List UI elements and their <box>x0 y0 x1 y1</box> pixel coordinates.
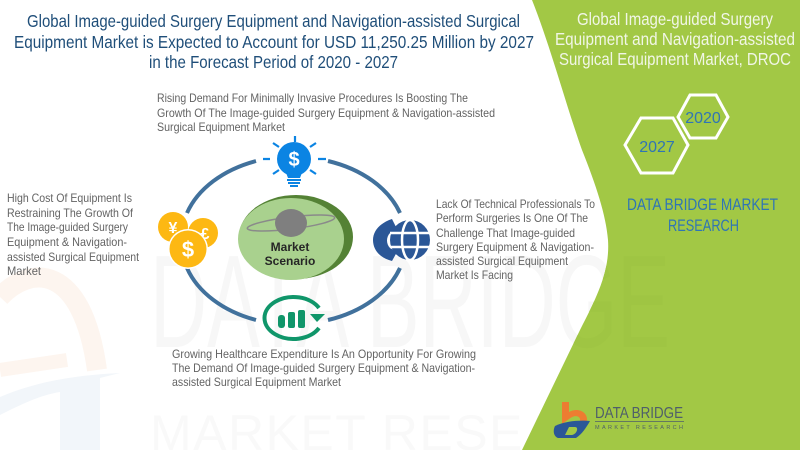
text block: challenges: Challenge That Image-guided <box>436 226 575 240</box>
text block: opportunities <box>172 347 476 389</box>
year hexagon: 2027: 2027 <box>639 139 675 156</box>
icon: growth chart with arrow <box>264 297 325 339</box>
text block: drivers: Surgical Equipment Market <box>157 120 286 134</box>
icon: phone and globe <box>373 219 430 261</box>
year hexagon: 2020: 2020 <box>685 110 721 127</box>
text block: drivers <box>157 91 495 134</box>
cycle ring <box>187 161 400 320</box>
center market scenario: Market <box>271 240 309 254</box>
text block: challenges: assisted Surgical Equipment <box>436 254 569 268</box>
background watermark <box>0 228 670 450</box>
text block: restraints: High Cost Of Equipment Is <box>7 191 132 205</box>
main title: Equipment Market is Expected to Account for USD 11,250.25 Million by 2027 <box>14 32 534 52</box>
main title: Global Image-guided Surgery Equipment and Navigation-assisted Surgical <box>27 11 520 31</box>
year hexagon: 2020 <box>678 95 728 138</box>
text block: opportunities: assisted Surgical Equipment Market <box>172 375 342 389</box>
text block: restraints: Restraining The Growth Of <box>7 206 134 220</box>
side panel title: Global Image-guided Surgery <box>577 9 773 29</box>
center market scenario: Scenario <box>265 254 315 268</box>
text block: restraints: Market <box>7 264 42 278</box>
icon: currency coins: $ <box>182 237 194 262</box>
center market scenario <box>238 195 353 280</box>
text block: drivers: Growth Of The Image-guided Surgery Equipment & Navigation-assisted <box>157 106 495 120</box>
text block: opportunities: The Demand Of Image-guided Surgery Equipment & Navigation- <box>172 361 475 375</box>
text block: opportunities: Growing Healthcare Expenditure Is An Opportunity For Growing <box>172 347 476 361</box>
side panel title <box>555 9 795 69</box>
company logo: DATA BRIDGE <box>595 405 683 422</box>
company logo <box>554 402 684 438</box>
green side panel <box>522 0 800 450</box>
main title <box>14 11 534 72</box>
text block: restraints: assisted Surgical Equipment <box>7 250 140 264</box>
text block: restraints: Equipment & Navigation- <box>7 235 127 249</box>
icon: light bulb with dollar: $ <box>288 149 300 171</box>
text block: challenges: Market Is Facing <box>436 268 513 282</box>
icon: currency coins: £ <box>201 226 210 243</box>
text block: challenges: Surgery Equipment & Navigation- <box>436 240 594 254</box>
icon: currency coins <box>158 212 218 269</box>
text block: challenges: Lack Of Technical Professionals To <box>436 197 595 211</box>
main title: in the Forecast Period of 2020 - 2027 <box>149 52 398 72</box>
planet icon <box>247 209 335 237</box>
text block: drivers: Rising Demand For Minimally Invasive Procedures Is Boosting The <box>157 91 468 105</box>
company name: RESEARCH <box>668 216 739 235</box>
text block: restraints: The Image-guided Surgery <box>7 220 128 234</box>
icon: light bulb with dollar <box>263 136 326 186</box>
text block: restraints <box>7 191 140 278</box>
company name <box>627 195 778 235</box>
company logo: MARKET RESEARCH <box>595 425 683 431</box>
text block: challenges <box>436 197 595 282</box>
text block: challenges: Perform Surgeries Is One Of The <box>436 211 588 225</box>
icon: currency coins: ¥ <box>169 220 178 237</box>
year hexagon: 2027 <box>625 118 688 173</box>
